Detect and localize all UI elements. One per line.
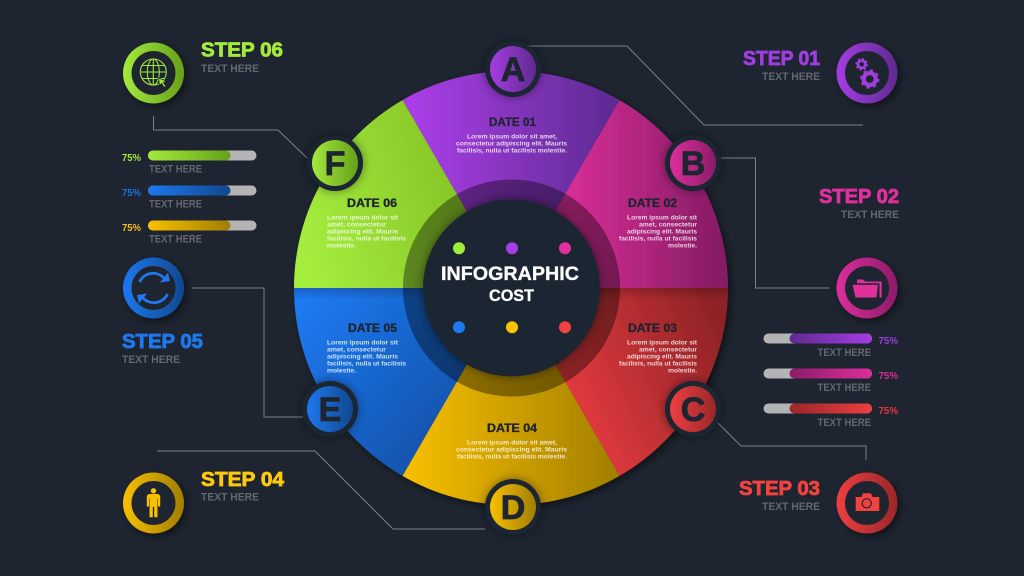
segment text: date 04 [456, 423, 568, 460]
left progress bars [122, 150, 256, 246]
bar: pink 75% [764, 368, 899, 394]
step 03 heading: STEP 03 [739, 478, 820, 500]
shadow under horizontal divide [294, 288, 728, 300]
bar: purple 75%: 75% [878, 335, 899, 347]
segment text: date 03: DATE 03 [628, 323, 677, 335]
segment text: date 01: consectetur adipiscing elit. Mauris [456, 140, 568, 148]
badge D [485, 479, 541, 535]
badge B: B [681, 145, 705, 183]
segment text: date 02: facilisis, nulla ut facilisis [619, 236, 698, 242]
bar: red 75% [764, 404, 899, 429]
step 06 caption: TEXT HERE [201, 63, 259, 75]
badge D: D [501, 489, 525, 527]
segment text: date 04: Lorem ipsum dolor sit amet, [467, 440, 557, 446]
step 02 caption: TEXT HERE [841, 209, 899, 221]
segment text: date 03: facilisis, nulla ut facilisis [619, 360, 698, 368]
segment text: date 06: amet, consectetur [327, 222, 387, 228]
segment text: date 05: molestie. [327, 368, 356, 374]
centre title [441, 264, 579, 305]
bar: pink 75%: 75% [878, 370, 899, 382]
bar: yellow 75%: 75% [122, 222, 142, 234]
donut wheel [294, 71, 728, 505]
segment text: date 05: adipiscing elit. Mauris [327, 354, 399, 360]
segment text: date 02: adipiscing elit. Mauris [627, 228, 698, 236]
step 05 caption: TEXT HERE [122, 354, 180, 366]
segment text: date 03: amet, consectetur [639, 346, 698, 354]
badge C: C [681, 391, 705, 429]
badge A [485, 41, 541, 97]
step 04 heading: STEP 04 [201, 469, 285, 491]
step 06 [123, 40, 283, 104]
segment text: date 04: facilisis, nulla ut facilisis molestie. [457, 454, 567, 460]
badge C [665, 381, 721, 437]
icon: camera [836, 472, 898, 534]
segment text: date 02: molestie. [668, 242, 697, 250]
segment text: date 01: DATE 01 [489, 117, 537, 129]
wheel segments [294, 71, 728, 505]
badge F [307, 135, 363, 191]
bar: purple 75%: TEXT HERE [818, 347, 871, 359]
icon: globe with cursor [123, 42, 184, 104]
segment text: date 01 [456, 117, 568, 154]
badge A: A [501, 51, 525, 89]
centre dots [453, 242, 571, 333]
step 01 heading: STEP 01 [743, 48, 820, 70]
step 01 caption: TEXT HERE [762, 71, 820, 83]
step 03 [739, 472, 898, 534]
bar: blue 75% [122, 186, 256, 210]
bar: red 75%: 75% [878, 405, 899, 417]
bar: yellow 75%: TEXT HERE [149, 234, 202, 246]
segment text: date 02: Lorem ipsum dolor sit [627, 214, 697, 222]
segment text: date 05: facilisis, nulla ut facilisis [327, 360, 407, 368]
step 01 [743, 42, 898, 104]
icon: sync arrows [123, 258, 184, 318]
connector lines [154, 46, 866, 529]
segment text: date 05: Lorem ipsum dolor sit [327, 340, 398, 346]
step 05 heading: STEP 05 [122, 331, 203, 353]
step 05 [122, 258, 203, 366]
bar: green 75%: 75% [122, 152, 142, 164]
segment text: date 05: DATE 05 [348, 323, 398, 335]
bar: green 75%: TEXT HERE [149, 164, 202, 176]
segment text: date 02: DATE 02 [628, 198, 677, 210]
step 03 caption: TEXT HERE [762, 501, 820, 513]
segment text: date 03 [619, 323, 698, 374]
segment text: date 03: adipiscing elit. Mauris [627, 354, 698, 360]
segment text: date 04: DATE 04 [487, 423, 538, 435]
inner translucent ring [403, 180, 620, 396]
bar: purple 75% [764, 334, 899, 359]
icon: gears [836, 42, 898, 104]
step 06 heading: STEP 06 [201, 40, 283, 62]
bar: blue 75%: TEXT HERE [149, 198, 202, 210]
right progress bars [764, 334, 899, 429]
segment text: date 02 [619, 198, 698, 250]
segment text: date 06 [327, 198, 407, 250]
segment text: date 05: amet, consectetur [327, 346, 387, 354]
segment text: date 06: facilisis, nulla ut facilisis [327, 236, 407, 242]
segment text: date 03: Lorem ipsum dolor sit [627, 340, 697, 346]
centre title: INFOGRAPHIC [441, 264, 579, 285]
segment text: date 03: molestie. [668, 368, 697, 374]
centre title: COST [489, 287, 534, 305]
badge E [302, 381, 358, 437]
step 04 caption: TEXT HERE [201, 492, 259, 504]
badge E: E [319, 391, 341, 429]
centre disc [423, 200, 600, 376]
segment text: date 06: Lorem ipsum dolor sit [327, 214, 398, 222]
icon: folder [836, 258, 898, 318]
step 02 [819, 186, 899, 318]
bar: blue 75%: 75% [122, 187, 142, 199]
segment text: date 02: amet, consectetur [639, 222, 698, 228]
segment text: date 01: Lorem ipsum dolor sit amet, [467, 134, 557, 140]
bar: yellow 75% [122, 220, 256, 246]
badge F: F [325, 145, 345, 183]
bar: pink 75%: TEXT HERE [818, 382, 871, 394]
step 04 [123, 469, 285, 534]
segment text: date 01: facilisis, nulla ut facilisis molestie. [457, 148, 567, 154]
badge B [665, 135, 721, 191]
segment text: date 05 [327, 323, 407, 374]
segment text: date 06: molestie. [327, 242, 356, 250]
icon: person [123, 472, 184, 534]
bar: green 75% [122, 150, 256, 176]
segment text: date 04: consectetur adipiscing elit. Mauris [456, 446, 568, 454]
segment text: date 06: DATE 06 [347, 198, 397, 210]
segment text: date 06: adipiscing elit. Mauris [327, 228, 399, 236]
bar: red 75%: TEXT HERE [818, 417, 871, 429]
step 02 heading: STEP 02 [819, 186, 899, 208]
